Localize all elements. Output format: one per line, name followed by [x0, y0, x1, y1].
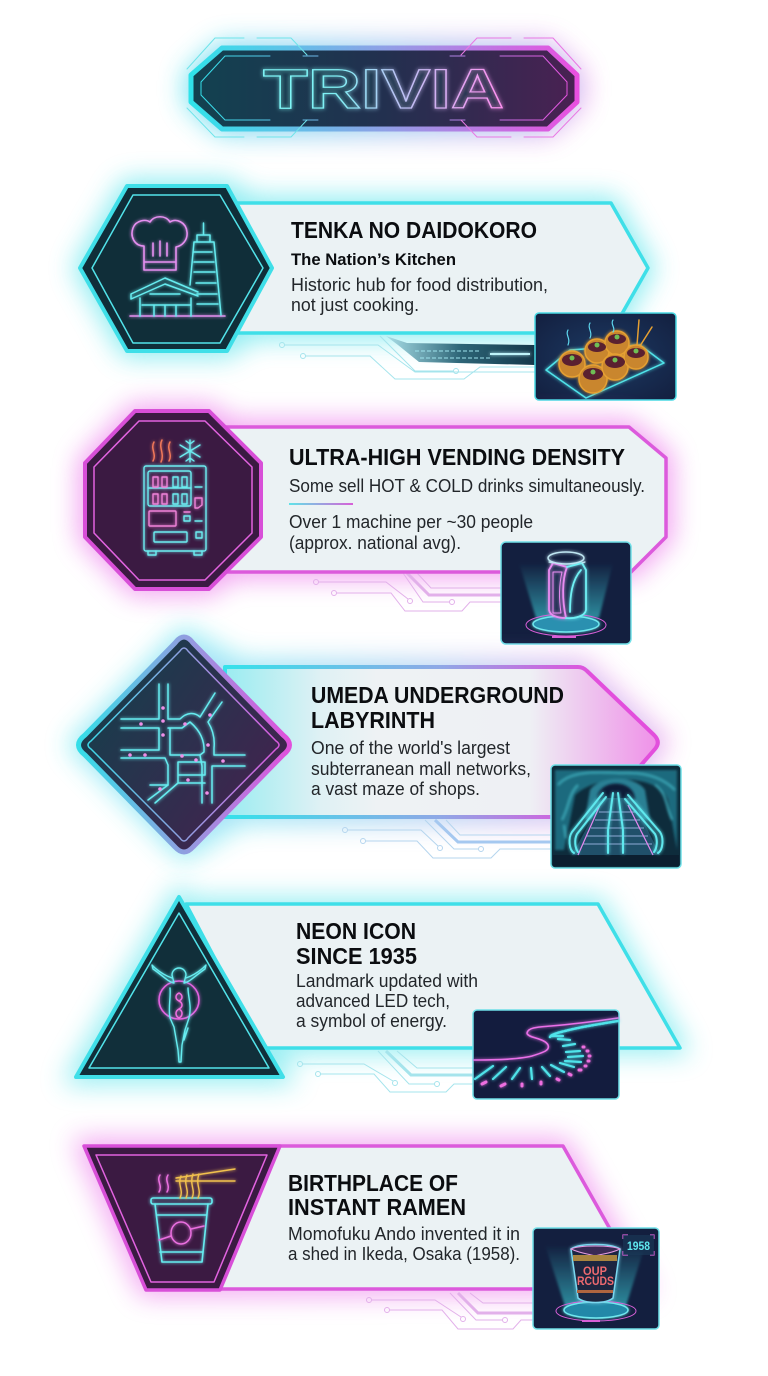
heading: NEON ICON	[296, 918, 416, 944]
image: takoyaki	[535, 313, 676, 400]
body text: Some sell HOT & COLD drinks simultaneously.	[289, 476, 645, 496]
body text: One of the world's largest	[311, 738, 510, 758]
title text: TRIVIA	[263, 57, 504, 120]
body text: Landmark updated with	[296, 971, 478, 991]
hexagon badge	[80, 186, 272, 351]
panel: Birthplace of instant ramen	[82, 1145, 659, 1329]
statistic text: Over 1 machine per ~30 people	[289, 512, 533, 532]
heading: TENKA NO DAIDOKORO	[291, 217, 537, 243]
body text: a shed in Ikeda, Osaka (1958).	[288, 1244, 520, 1264]
icon: underground map	[88, 648, 279, 841]
icon: chef hat and city	[92, 195, 263, 343]
heading	[296, 918, 417, 969]
body text: subterranean mall networks,	[311, 759, 531, 779]
statistic text	[289, 512, 533, 553]
diamond badge	[78, 637, 290, 852]
title banner	[187, 38, 581, 137]
heading	[311, 682, 564, 733]
panel: Neon icon since 1935	[73, 894, 680, 1099]
image: escalator tunnel	[551, 765, 681, 868]
triangle badge	[76, 897, 283, 1077]
heading: BIRTHPLACE OF	[288, 1170, 458, 1196]
image: holographic cup noodle: 1958	[627, 1239, 650, 1253]
image: holographic cup noodle	[533, 1228, 659, 1329]
panel: Tenka no Daidokoro	[80, 186, 676, 400]
body text	[288, 1224, 520, 1264]
circuit traces	[366, 1293, 533, 1329]
body text	[296, 971, 478, 1031]
circuit traces	[314, 573, 501, 611]
icon: instant ramen cup	[96, 1155, 267, 1282]
body text: a vast maze of shops.	[311, 779, 480, 799]
subheading: The Nation’s Kitchen	[291, 250, 456, 269]
image: LED road	[473, 1010, 619, 1099]
body text: Historic hub for food distribution,	[291, 275, 548, 295]
heading: SINCE 1935	[296, 943, 417, 969]
image: holographic can	[501, 542, 631, 644]
text card	[235, 203, 648, 333]
circuit traces	[280, 336, 535, 379]
trapezoid badge	[84, 1146, 280, 1290]
icon: vending machine	[94, 421, 252, 580]
text card	[186, 904, 680, 1048]
body text: Momofuku Ando invented it in	[288, 1224, 520, 1244]
body text	[291, 275, 548, 315]
icon: running man	[89, 913, 269, 1068]
circuit traces	[342, 820, 551, 858]
heading: INSTANT RAMEN	[288, 1194, 466, 1220]
text card	[225, 667, 658, 817]
body text: a symbol of energy.	[296, 1011, 447, 1031]
panel: Umeda underground labyrinth	[76, 635, 681, 868]
body text	[311, 738, 531, 799]
body text: advanced LED tech,	[296, 991, 450, 1011]
image: holographic cup noodle: RCUDS	[577, 1274, 614, 1288]
octagon badge	[85, 411, 261, 589]
text card	[200, 1146, 644, 1289]
statistic text: (approx. national avg).	[289, 533, 461, 553]
circuit traces	[298, 1051, 473, 1092]
body text: not just cooking.	[291, 295, 419, 315]
heading: LABYRINTH	[311, 707, 435, 733]
heading	[288, 1170, 466, 1220]
heading: UMEDA UNDERGROUND	[311, 682, 564, 708]
panel: Ultra-high vending density	[85, 411, 666, 644]
image: holographic cup noodle: OUP	[583, 1264, 607, 1278]
heading: ULTRA-HIGH VENDING DENSITY	[289, 444, 625, 470]
text card	[225, 427, 666, 572]
